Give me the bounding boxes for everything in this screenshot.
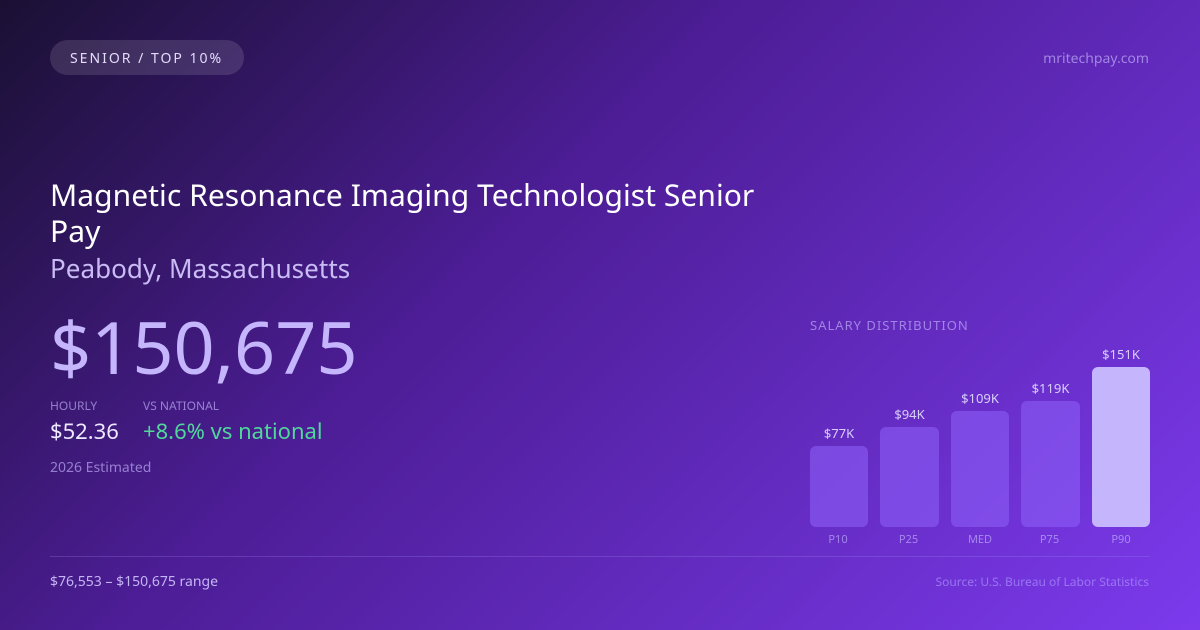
bar median (951, 411, 1009, 527)
location subtitle: Peabody, Massachusetts (50, 250, 350, 286)
bar P10 (810, 446, 868, 527)
bar P90 (1092, 367, 1150, 527)
axis label P10: P10 (828, 532, 848, 547)
chart: salary distribution (810, 316, 1150, 547)
title: Magnetic Resonance Imaging Technologist Senior (50, 174, 754, 215)
title: Pay (50, 210, 100, 251)
axis label P90: P90 (1111, 532, 1131, 547)
axis label P75: P75 (1040, 532, 1059, 547)
value label P10: $77K (824, 424, 854, 442)
year note: 2026 Estimated (50, 458, 151, 477)
title (50, 174, 754, 251)
value label P25: $94K (894, 405, 925, 423)
salary range: $76,553 – $150,675 range (50, 572, 218, 591)
vs national label: VS NATIONAL (143, 397, 219, 414)
hourly label: HOURLY (50, 397, 97, 414)
badge: senior / top 10%: SENIOR / TOP 10% (70, 49, 223, 68)
stat: hourly (50, 397, 119, 446)
axis label P25: P25 (899, 532, 918, 547)
bar P25 (880, 427, 939, 527)
value label median: $109K (961, 389, 999, 407)
stat: vs national (143, 397, 323, 446)
value label P90: $151K (1102, 345, 1140, 363)
axis label median: MED (968, 532, 992, 547)
chart heading: SALARY DISTRIBUTION (810, 316, 969, 334)
badge: senior / top 10% (50, 40, 244, 75)
source note: Source: U.S. Bureau of Labor Statistics (936, 573, 1149, 590)
hourly value: $52.36 (50, 416, 119, 446)
salary figure: $150,675 (50, 298, 358, 396)
value label P75: $119K (1032, 379, 1069, 397)
site name: mritechpay.com (1043, 49, 1149, 68)
vs national value: +8.6% vs national (143, 416, 323, 446)
bar P75 (1021, 401, 1080, 527)
